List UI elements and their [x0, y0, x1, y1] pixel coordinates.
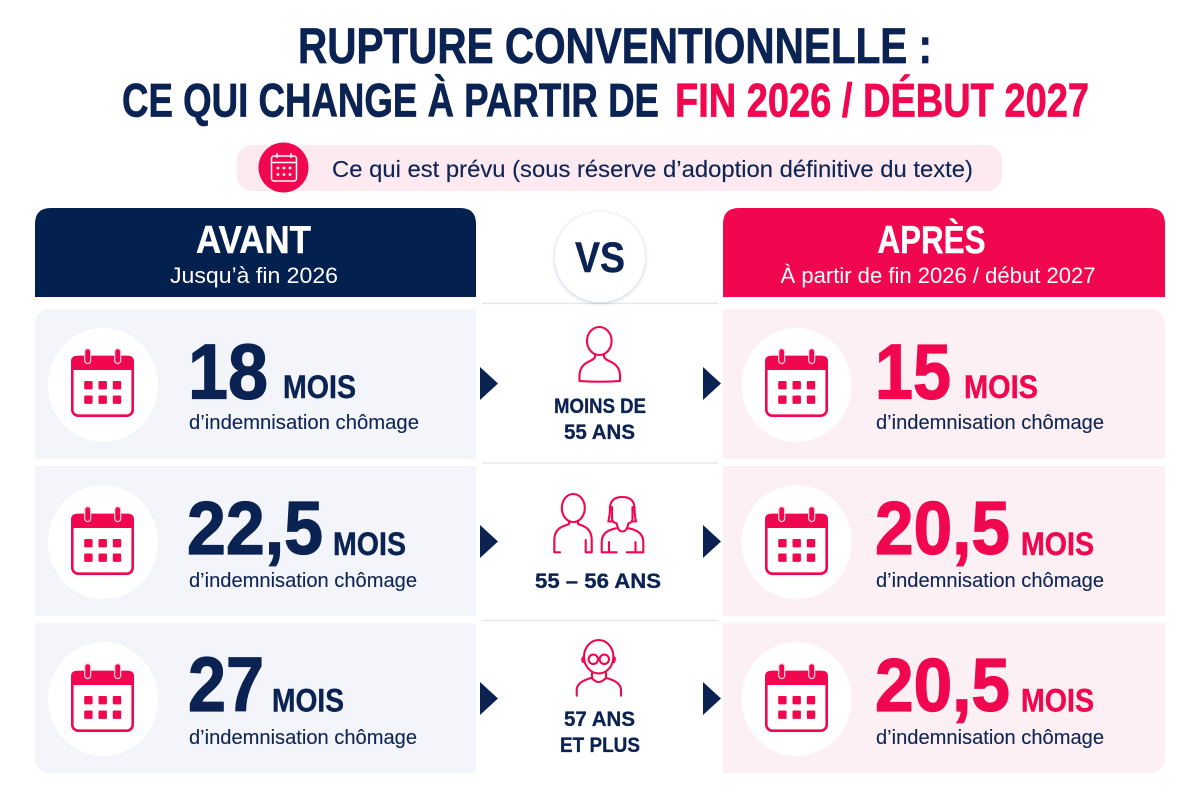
- VS badge: VS: [575, 234, 625, 282]
- arrows row 1: [480, 367, 721, 400]
- arrows row 3: [480, 682, 721, 715]
- icon: calendar: [71, 664, 134, 731]
- panel: avant 18 mois: d’indemnisation chômage: [189, 412, 419, 434]
- panel: après 20,5 mois (57 ans et plus): MOIS: [1021, 682, 1094, 718]
- panel: après 20,5 mois (55-56 ans): d’indemnisation chômage: [876, 570, 1104, 592]
- icon: calendar: [765, 349, 828, 416]
- age label: moins de 55 ans: MOINS DE: [554, 395, 646, 418]
- panel: avant 27 mois: d’indemnisation chômage: [189, 727, 417, 749]
- VS badge: [555, 212, 645, 302]
- panel: avant 27 mois: [35, 623, 476, 773]
- panel: après 20,5 mois (57 ans et plus): d’indemnisation chômage: [876, 727, 1104, 749]
- age label: 57 ans et plus: ET PLUS: [560, 734, 640, 757]
- panel: avant 22,5 mois: [35, 466, 476, 616]
- icon: senior with glasses: [577, 640, 621, 696]
- panel: après 20,5 mois (57 ans et plus): [723, 623, 1165, 773]
- age label: 57 ans et plus: [560, 708, 640, 757]
- value: 20,5: [875, 486, 1010, 570]
- icon: calendar: [71, 349, 134, 416]
- icon: calendar: [765, 507, 828, 574]
- age label: 55 – 56 ans: 55 – 56 ANS: [535, 570, 661, 593]
- icon: man and woman: [554, 494, 643, 552]
- icon: calendar: [765, 664, 828, 731]
- value: 18: [188, 328, 268, 416]
- panel: header avant: Jusqu’à fin 2026: [170, 263, 338, 288]
- title: RUPTURE CONVENTIONNELLE :: [298, 18, 932, 74]
- panel: après 15 mois: d’indemnisation chômage: [876, 412, 1104, 434]
- panel: avant 18 mois: MOIS: [283, 369, 356, 405]
- title: CE QUI CHANGE À PARTIR DE: [122, 74, 659, 126]
- dividers: [482, 304, 718, 620]
- age label: moins de 55 ans: 55 ANS: [564, 421, 635, 444]
- panel: après 20,5 mois (55-56 ans): [723, 466, 1165, 616]
- panel: avant 18 mois: [35, 309, 476, 459]
- age label: moins de 55 ans: [554, 395, 646, 444]
- panel: header avant: AVANT: [196, 219, 311, 262]
- panel: avant 27 mois: MOIS: [272, 682, 344, 718]
- icon: calendar in red circle: [258, 142, 308, 192]
- panel: après 20,5 mois (55-56 ans): MOIS: [1021, 526, 1094, 562]
- subtitle text: Ce qui est prévu (sous réserve d’adoption définitive du texte): [332, 156, 973, 182]
- value: 27: [188, 642, 264, 728]
- panel: après 15 mois: MOIS: [964, 369, 1038, 405]
- value: 22,5: [187, 486, 323, 570]
- age label: 57 ans et plus: 57 ANS: [564, 708, 635, 731]
- title: [122, 18, 1089, 126]
- panel: header après: [723, 208, 1165, 297]
- panel: avant 22,5 mois: d’indemnisation chômage: [189, 570, 417, 592]
- arrows row 2: [480, 525, 721, 558]
- icon: calendar: [71, 507, 134, 574]
- panel: header après: APRÈS: [878, 218, 986, 262]
- icon: person: [580, 327, 620, 382]
- title: FIN 2026 / DÉBUT 2027: [675, 74, 1089, 126]
- subtitle pill: [237, 142, 1002, 192]
- value: 15: [875, 328, 951, 416]
- panel: avant 22,5 mois: MOIS: [333, 526, 406, 562]
- panel: header après: À partir de fin 2026 / début 2027: [780, 263, 1096, 288]
- panel: après 15 mois: [723, 309, 1165, 459]
- value: 20,5: [875, 643, 1010, 727]
- panel: header avant: [35, 208, 476, 297]
